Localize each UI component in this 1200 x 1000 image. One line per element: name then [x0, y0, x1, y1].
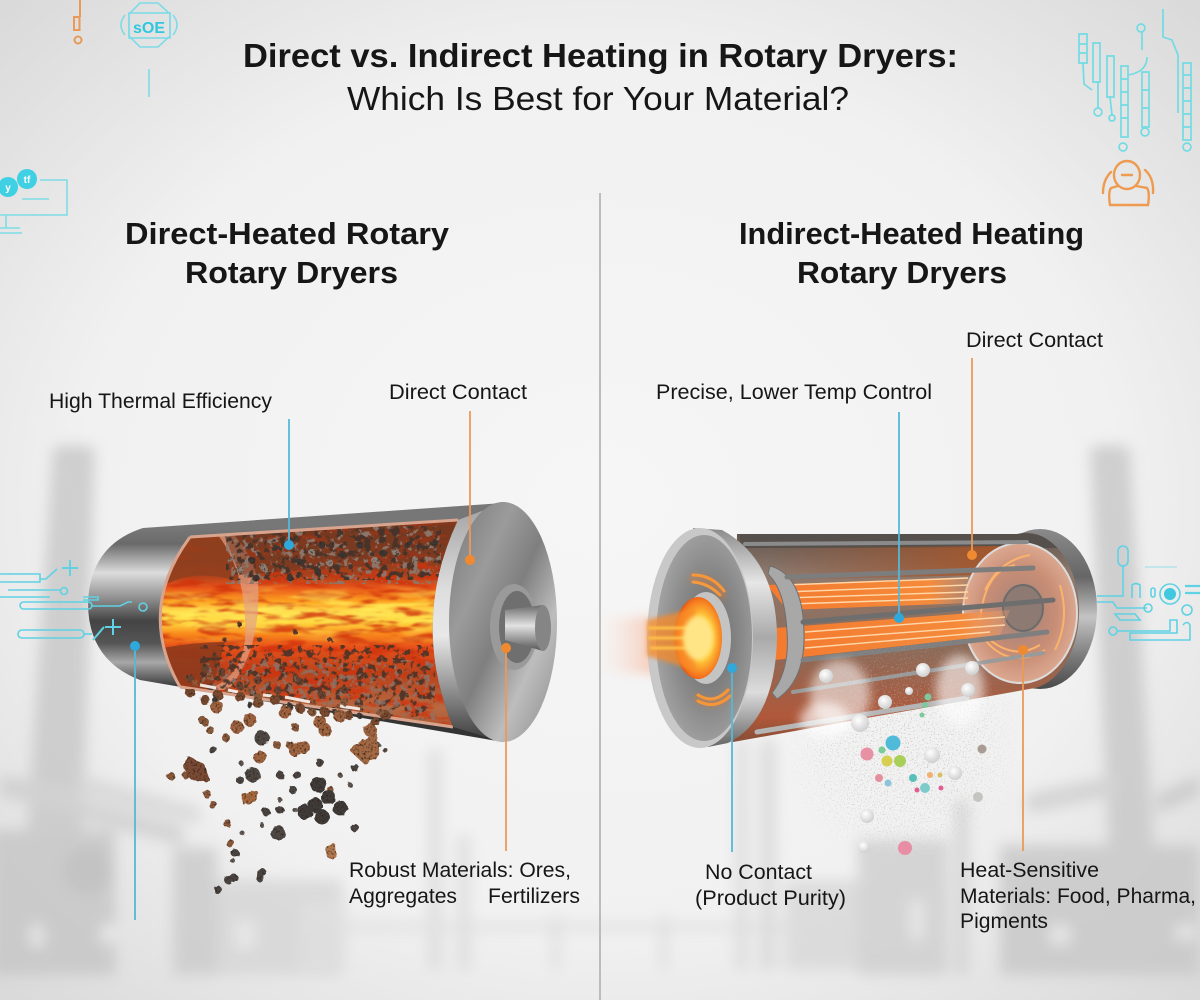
discharge slots and rim debris — [190, 685, 385, 722]
callout: heat-sensitive materials — [960, 645, 1196, 933]
callout: no contact — [695, 663, 846, 910]
rubble inside drum — [200, 526, 441, 720]
direct-heated dryer cylinder — [88, 502, 557, 742]
window rim — [160, 520, 458, 727]
indirect dryer callouts — [656, 329, 1196, 933]
right heading — [739, 216, 1084, 290]
divider — [599, 193, 601, 1000]
callout: precise temp control — [656, 381, 932, 623]
white granules — [819, 661, 979, 853]
callout: shell marker — [130, 641, 140, 920]
decorative circuit: right — [1097, 546, 1200, 640]
rear ring — [983, 529, 1097, 689]
callout: no contact: No Contact — [705, 861, 812, 884]
silver band — [433, 503, 503, 742]
callout: high thermal efficiency — [49, 390, 294, 550]
icon: orange person — [1103, 161, 1153, 205]
falling rocks — [171, 698, 385, 890]
flame jet — [600, 615, 700, 676]
callout: direct contact: Direct Contact — [389, 381, 527, 404]
decorative tech icons: top left — [74, 0, 177, 97]
callout: robust materials — [349, 643, 580, 908]
indirect-heated dryer cylinder — [600, 528, 1097, 750]
callout: robust materials: Fertilizers — [488, 885, 580, 908]
title: Direct vs. Indirect Heating in Rotary Dryers: — [243, 37, 958, 74]
callout: precise temp control: Precise, Lower Temp Control — [656, 381, 932, 404]
decorative circuit: left — [0, 560, 147, 640]
debris inside drum — [190, 543, 435, 715]
end disc — [449, 502, 557, 742]
interior — [730, 530, 1080, 750]
left heading: Rotary Dryers — [185, 255, 398, 290]
cylinder shell — [88, 503, 503, 742]
background: factory highlights — [30, 900, 1195, 950]
right heading: Rotary Dryers — [797, 255, 1007, 290]
left heading: Direct-Heated Rotary — [125, 216, 450, 251]
callout: direct contact: Direct Contact — [966, 329, 1103, 352]
decorative tech icons: top left: sOE — [133, 20, 165, 37]
orange heat band: lower — [775, 610, 1010, 660]
background: blurred factory silhouettes — [0, 445, 1200, 975]
interior fire window — [162, 522, 458, 726]
decorative tech icon: left monitor — [0, 169, 67, 233]
rods — [745, 542, 1053, 732]
colored granules — [860, 694, 986, 855]
hub and shaft — [490, 584, 551, 670]
heat arcs on front disc — [693, 575, 730, 705]
left heading — [125, 216, 450, 290]
front disc face — [647, 528, 753, 748]
title — [243, 37, 958, 117]
callout: robust materials: Robust Materials: Ores, — [349, 859, 571, 882]
callout: heat-sensitive materials: Heat-Sensitive — [960, 859, 1099, 882]
orange heat band: upper — [767, 577, 970, 610]
front band — [693, 528, 777, 747]
heated rear plate — [963, 543, 1077, 683]
decorative tech icons: top right circuits — [1079, 9, 1191, 151]
decorative tech icon: left monitor: y — [5, 183, 11, 194]
callout: direct contact — [389, 381, 527, 565]
burner hub with flame — [647, 592, 731, 684]
callout: robust materials: Aggregates — [349, 885, 457, 908]
right heading: Indirect-Heated Heating — [739, 216, 1084, 251]
direct dryer callouts — [49, 381, 580, 920]
powder plume — [791, 628, 1017, 855]
callout: heat-sensitive materials: Materials: Food, Pharma, — [960, 885, 1196, 908]
decorative tech icon: left monitor: tf — [24, 175, 31, 186]
callout: heat-sensitive materials: Pigments — [960, 910, 1048, 933]
callout: high thermal efficiency: High Thermal Efficiency — [49, 390, 273, 413]
callout: no contact: (Product Purity) — [695, 887, 846, 910]
inner ring — [768, 566, 804, 699]
title: Which Is Best for Your Material? — [347, 80, 849, 117]
callout: direct contact — [966, 329, 1103, 560]
